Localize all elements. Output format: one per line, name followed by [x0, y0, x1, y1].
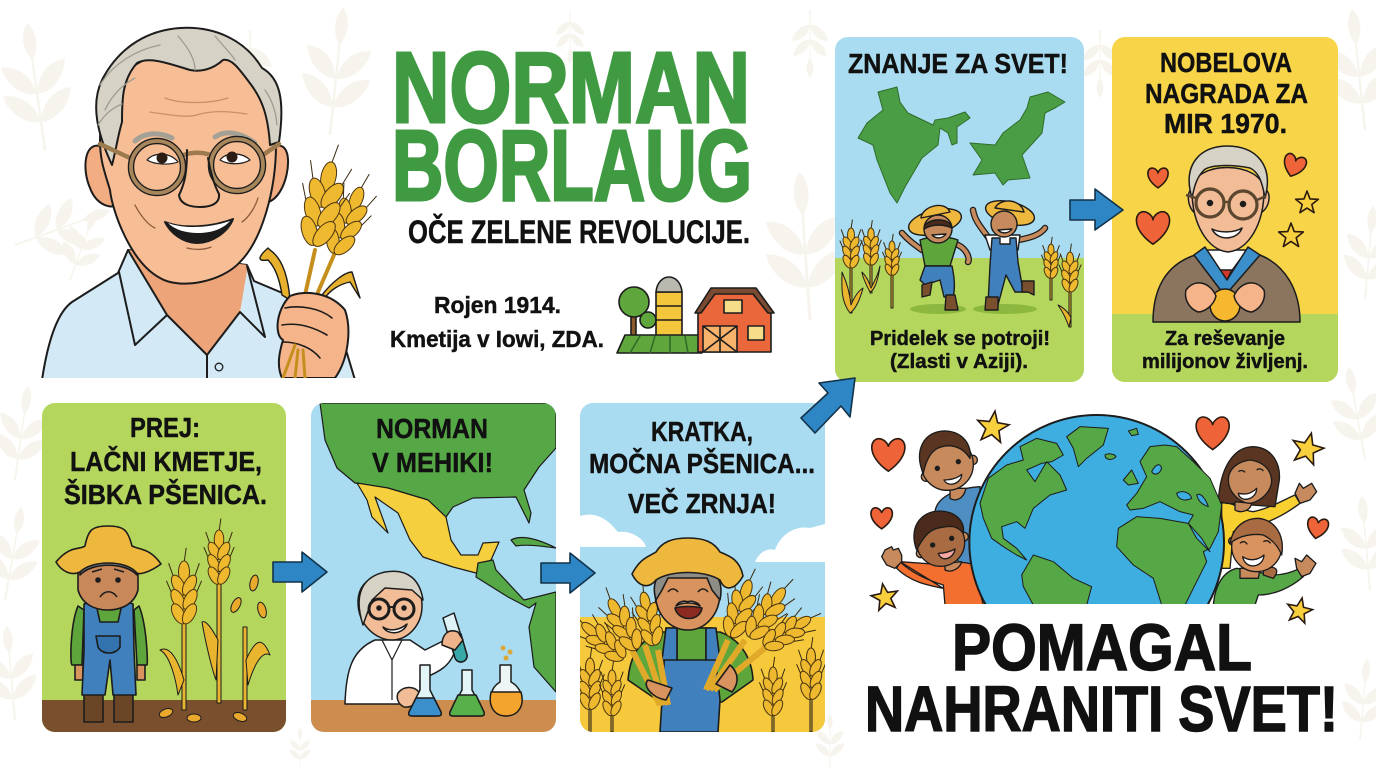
thin wheat: [160, 519, 270, 710]
caption: milijonov življenj.: [1142, 351, 1308, 373]
heading: NAGRADA ZA: [1145, 78, 1308, 109]
sad farmer: [56, 526, 161, 722]
laureate with medal: [1153, 146, 1300, 322]
hair: [96, 28, 281, 165]
title: [392, 32, 752, 222]
map of India: [858, 87, 970, 203]
face: [100, 50, 276, 284]
heading: MIR 1970.: [1164, 108, 1287, 139]
wheat bunch: [260, 139, 385, 300]
shirt: [42, 250, 355, 380]
hearts and stars: [869, 409, 1329, 624]
heading: PREJ:: [130, 412, 200, 443]
icon: farm: [617, 277, 774, 353]
heading: MOČNA PŠENICA...: [589, 447, 815, 479]
nose: [179, 150, 219, 207]
smile: [165, 219, 233, 243]
heading: NORMAN: [376, 413, 488, 444]
heading: KRATKA,: [651, 416, 753, 447]
hearts and stars: [1136, 152, 1318, 247]
heading: ZNANJE ZA SVET!: [848, 48, 1068, 79]
child: boy in blue: [919, 431, 980, 565]
subtitle: OČE ZELENE REVOLUCIJE.: [408, 214, 750, 250]
eyes: [147, 154, 250, 164]
scientist: [345, 571, 467, 707]
heading: [64, 418, 266, 504]
heading: [590, 422, 814, 514]
closing slogan: POMAGAL: [952, 610, 1252, 684]
button: [215, 363, 223, 371]
panel: Nobel peace prize: [1112, 37, 1338, 382]
title: NORMAN: [392, 32, 750, 144]
heading: VEČ ZRNJA!: [628, 487, 776, 519]
title: BORLAUG: [392, 110, 752, 222]
globe with children: [869, 409, 1329, 670]
caption: Pridelek se potroji!: [870, 328, 1050, 350]
caption: [1142, 328, 1308, 373]
arrow: panel 4 to 5: [1070, 189, 1123, 230]
heading: V MEHIKI!: [372, 447, 493, 478]
flasks: [409, 646, 522, 716]
birth info: Rojen 1914.: [434, 292, 561, 318]
arrow: panel 3 to 4: [801, 378, 855, 433]
earth: [969, 415, 1224, 670]
girl jumping: [902, 204, 969, 314]
clouds: [580, 515, 825, 562]
heading: [372, 418, 491, 472]
caption: Za reševanje: [1165, 328, 1285, 350]
map of Pakistan: [970, 92, 1065, 185]
panel: Norman in Mexico: [311, 403, 556, 732]
neck: [128, 250, 248, 355]
happy farmer: [564, 538, 828, 732]
field wheat: [576, 637, 825, 732]
wheat bouquets: [580, 568, 822, 706]
heading: [1145, 47, 1308, 139]
heading: ŠIBKA PŠENICA.: [64, 478, 267, 510]
collar: [119, 250, 265, 380]
child: girl in yellow: [1218, 447, 1317, 568]
caption: (Zlasti v Aziji).: [890, 351, 1028, 373]
map of North America: [320, 403, 556, 692]
falling seeds: [158, 574, 268, 723]
panel: before, hungry farmers: [42, 403, 286, 732]
birth info: [390, 292, 604, 352]
panel: short strong wheat: [564, 403, 828, 732]
closing slogan: [865, 610, 1338, 745]
ears: [85, 146, 288, 206]
child: kid in green: [1213, 518, 1316, 605]
child: boy in orange: [882, 511, 983, 605]
boy jumping: [973, 196, 1045, 314]
hand: [278, 293, 348, 378]
hair strands: [98, 36, 277, 125]
arrows: [273, 189, 1123, 593]
birth info: Kmetija v Iowi, ZDA.: [390, 326, 604, 352]
panel: knowledge for the world: [835, 37, 1084, 382]
eyebrows and forehead lines: [135, 133, 255, 143]
caption: [870, 328, 1050, 373]
heading: NOBELOVA: [1160, 47, 1292, 78]
wheat plants: [840, 220, 1081, 327]
arrow: panel 1 to 2: [273, 552, 327, 592]
portrait of Norman Borlaug holding wheat: [42, 28, 385, 380]
heading: LAČNI KMETJE,: [70, 445, 262, 477]
glasses: [100, 139, 279, 193]
arrow: panel 2 to 3: [541, 553, 595, 593]
wheat field: [580, 617, 825, 732]
